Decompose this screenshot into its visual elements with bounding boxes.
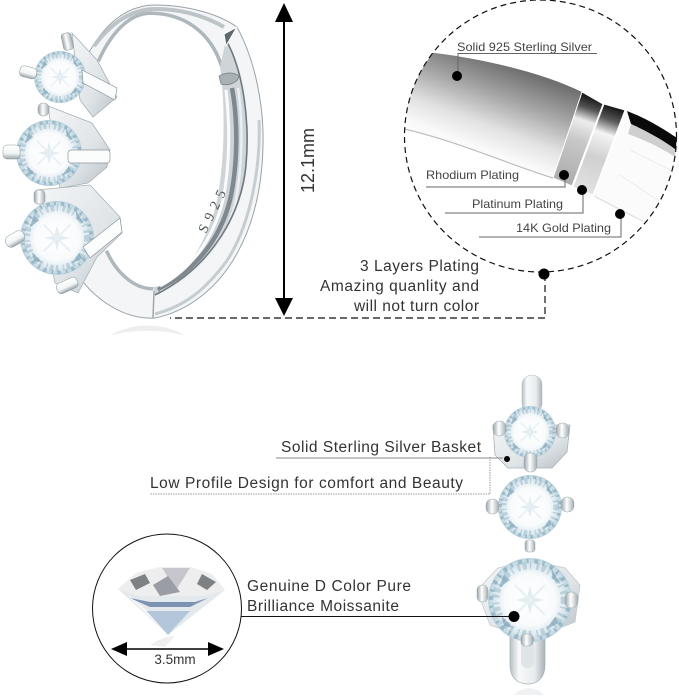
label: platinum plating <box>445 185 587 213</box>
plating description text: 3 Layers Plating <box>360 258 479 275</box>
top post <box>522 375 542 413</box>
top basket <box>493 425 570 468</box>
label: solid sterling silver basket and low profile design: Low Profile Design for comfort and Beauty <box>150 475 463 492</box>
inner stripe highlight <box>160 90 229 286</box>
plating description text: will not turn color <box>353 298 479 315</box>
diameter label: 3.5mm <box>154 652 196 667</box>
top stone prongs <box>493 421 569 472</box>
middle stone prongs <box>486 497 574 552</box>
clasp notch <box>224 27 237 46</box>
dashed connector from circle to earring <box>170 268 550 318</box>
hoop hole <box>60 15 224 287</box>
bottom basket <box>477 560 580 640</box>
hoop body <box>78 5 263 318</box>
inner surface stripes <box>158 88 236 290</box>
light stripe beside groove <box>160 88 241 292</box>
S925 stamp: S925 <box>196 188 230 236</box>
width arrow <box>111 642 224 656</box>
hoop inner shade <box>521 632 534 668</box>
label: solid 925 sterling silver: Solid 925 Sterling Silver <box>457 40 592 54</box>
plating cross-section band <box>400 48 679 225</box>
bottom stone prongs <box>477 585 578 646</box>
groove line <box>155 40 247 295</box>
inner edge shading <box>100 15 220 287</box>
height dimension arrow <box>275 3 293 316</box>
label: 14K gold plating <box>479 209 625 237</box>
top stone <box>504 406 556 458</box>
label: genuine moissanite <box>241 578 520 622</box>
label: solid sterling silver basket and low profile design: Solid Sterling Silver Basket <box>281 439 482 456</box>
right outer band shading <box>155 120 259 314</box>
top stone setting <box>18 32 117 117</box>
lower earring front view <box>477 375 580 695</box>
seam <box>153 291 154 318</box>
label: solid 925 sterling silver <box>452 40 597 81</box>
dashed circle outline <box>404 0 676 272</box>
label: platinum plating: Platinum Plating <box>472 197 563 211</box>
bottom reflection <box>514 688 544 695</box>
moissanite circle <box>92 534 242 683</box>
hinge detail <box>219 73 239 85</box>
inner surface of hoop <box>153 40 247 295</box>
height label: 12.1mm <box>298 128 318 193</box>
middle stone <box>498 475 562 539</box>
top earring photo <box>3 5 263 336</box>
middle stone setting <box>3 103 110 188</box>
label: rhodium plating: Rhodium Plating <box>426 168 519 182</box>
bottom stone setting <box>3 185 122 295</box>
label: genuine moissanite: Genuine D Color Pure <box>247 578 411 595</box>
hoop highlights and shading <box>94 9 224 46</box>
label: genuine moissanite: Brilliance Moissanite <box>247 598 399 615</box>
plating description text <box>320 258 479 315</box>
bottom hoop <box>510 625 545 684</box>
label: solid sterling silver basket and low profile design <box>150 439 510 494</box>
bottom stone <box>488 558 572 642</box>
label: 14K gold plating: 14K Gold Plating <box>516 221 611 235</box>
label: rhodium plating <box>426 168 569 187</box>
detail circle: plating layers <box>400 0 679 272</box>
icon: diamond <box>118 567 225 647</box>
reflection <box>110 326 185 336</box>
plating description text: Amazing quanlity and <box>320 278 479 295</box>
